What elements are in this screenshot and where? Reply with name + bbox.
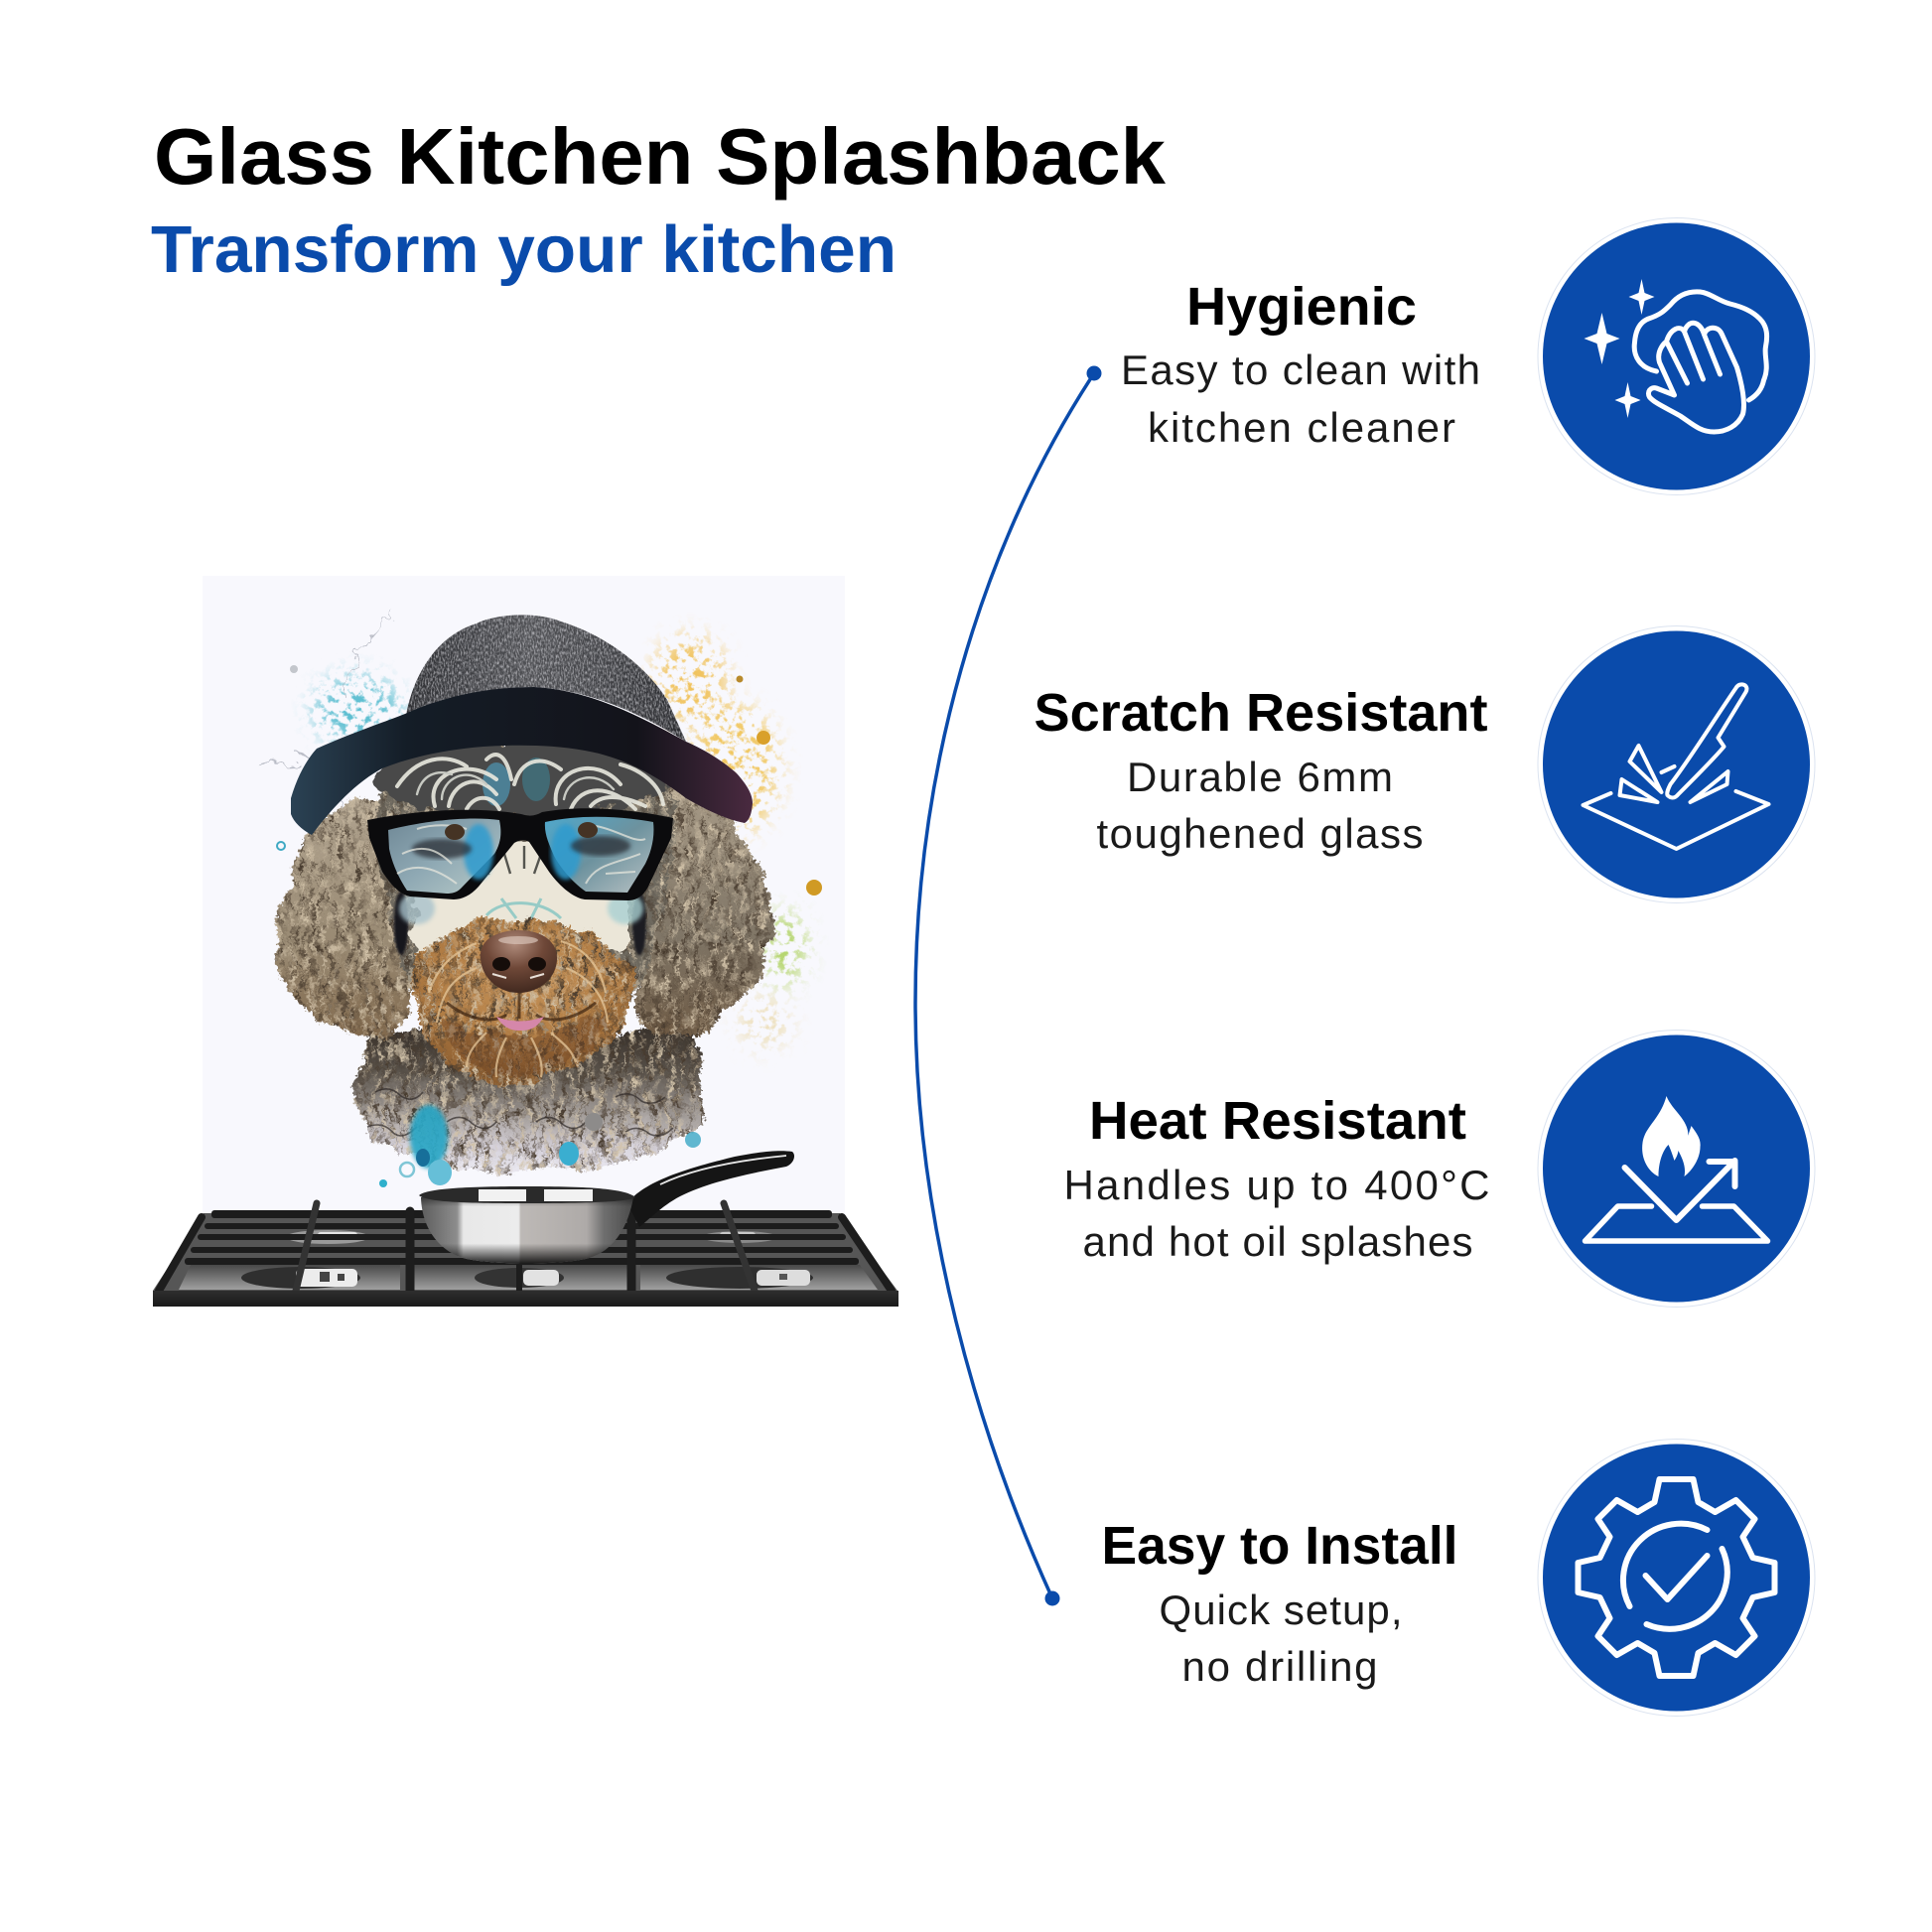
pan handle — [627, 1151, 794, 1227]
dog ears and head fur — [276, 742, 772, 1040]
subtitle: Transform your kitchen — [151, 212, 897, 287]
dog face cream fur — [399, 839, 643, 953]
feature: hygienic — [1121, 277, 1480, 451]
dog mouth — [496, 1017, 544, 1031]
feature: scratch resistant — [1035, 683, 1488, 857]
icon: knife scratching glass — [1538, 625, 1815, 903]
feature: heat resistant — [1064, 1091, 1489, 1265]
description — [1064, 1162, 1489, 1265]
icon: hand wiping with sparkles — [1538, 218, 1815, 494]
heading: Easy to Install — [1102, 1516, 1457, 1576]
description — [1096, 754, 1424, 857]
description — [1160, 1587, 1402, 1690]
steel panels — [179, 1265, 878, 1290]
feature: easy to install — [1102, 1516, 1457, 1690]
icon: flame and heat deflection — [1538, 1031, 1815, 1307]
cooktop front edge — [153, 1291, 898, 1307]
dog hat — [291, 615, 753, 835]
icon: gear with check mark — [1538, 1440, 1815, 1716]
cooktop surface — [153, 1213, 897, 1291]
splashback panel — [203, 576, 845, 1241]
pan body — [421, 1197, 633, 1263]
dog glasses — [367, 808, 673, 900]
title: Glass Kitchen Splashback — [154, 112, 1167, 201]
description: kitchen cleaner — [1148, 404, 1455, 451]
cooktop with grates and burners — [153, 1203, 898, 1307]
description: no drilling — [1181, 1643, 1378, 1690]
watercolour splashes — [258, 611, 822, 1048]
horizontal grate bars — [185, 1210, 859, 1265]
dog muzzle and beard — [409, 918, 635, 1083]
description: Quick setup, — [1160, 1587, 1402, 1633]
dog nose — [481, 930, 557, 993]
heading: Scratch Resistant — [1035, 683, 1488, 743]
forehead curls — [397, 755, 663, 809]
heading: Heat Resistant — [1089, 1091, 1466, 1151]
frying pan — [419, 1151, 794, 1263]
burners — [241, 1230, 813, 1289]
description: toughened glass — [1096, 810, 1424, 857]
connector curve with end dots — [915, 365, 1102, 1606]
description — [1121, 346, 1480, 451]
description: and hot oil splashes — [1082, 1218, 1473, 1265]
description: Durable 6mm — [1127, 754, 1393, 800]
dog chest and neck — [358, 1033, 704, 1187]
description: Easy to clean with — [1121, 346, 1480, 393]
heading: Hygienic — [1186, 277, 1417, 337]
description: Handles up to 400°C — [1064, 1162, 1489, 1208]
product image: splashback with dog artwork and cooktop — [153, 576, 898, 1307]
vertical grate bars — [159, 1203, 892, 1291]
pan rim — [419, 1186, 635, 1203]
